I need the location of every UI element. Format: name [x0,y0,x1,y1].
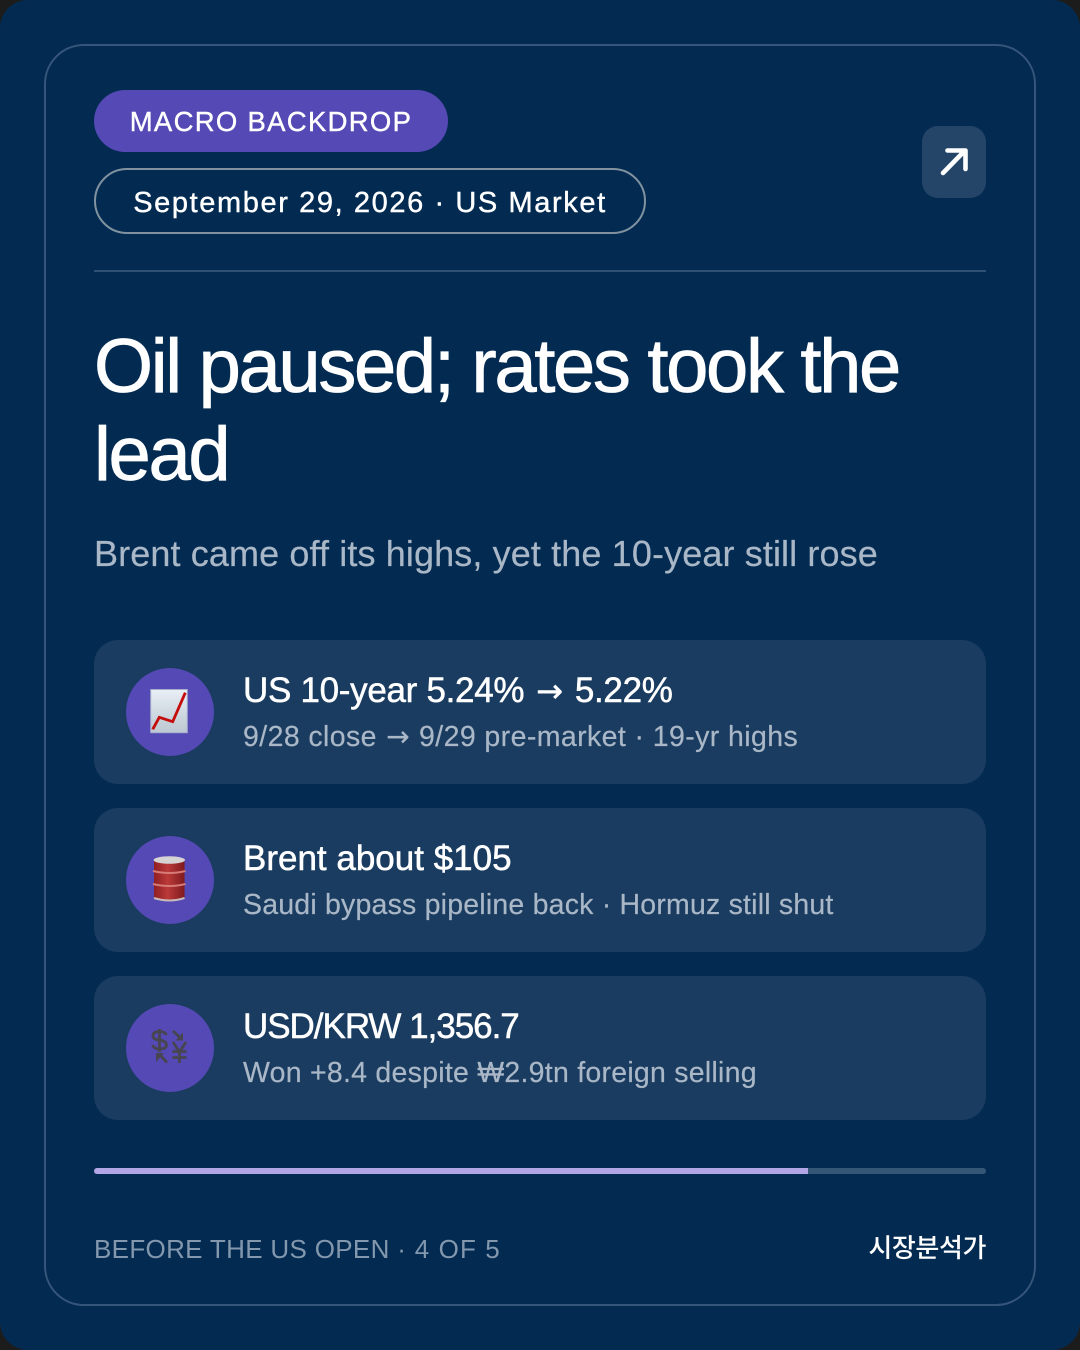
heading: US 10-year 5.24% → 5.22% [243,671,673,710]
heading: USD/KRW 1,356.7 [243,1007,519,1046]
icon: oil drum [126,836,214,924]
progress bar [94,1168,986,1174]
footer label: BEFORE THE US OPEN · 4 OF 5 [94,1234,501,1264]
title [94,324,899,497]
detail: Saudi bypass pipeline back · Hormuz still shut [243,889,834,921]
title: Oil paused; rates took the [94,324,899,409]
panel: USD/KRW [94,976,986,1120]
panel: US 10-year [94,640,986,784]
tag: macro backdrop [94,90,448,152]
tag: macro backdrop: MACRO BACKDROP [130,106,412,137]
icon: currency exchange [126,1004,214,1092]
detail: Won +8.4 despite ₩2.9tn foreign selling [243,1057,757,1089]
subtitle: Brent came off its highs, yet the 10-year still rose [94,533,878,574]
panel: Brent [94,808,986,952]
heading: Brent about $105 [243,839,512,878]
date pill: September 29, 2026 · US Market [133,187,607,219]
date pill [94,168,646,234]
divider [94,270,986,272]
title: lead [94,412,228,497]
detail: 9/28 close → 9/29 pre-market · 19-yr highs [243,720,798,753]
brand: 시장분석가 [868,1228,986,1265]
icon: chart increasing [126,668,214,756]
icon: arrow button [922,126,986,198]
